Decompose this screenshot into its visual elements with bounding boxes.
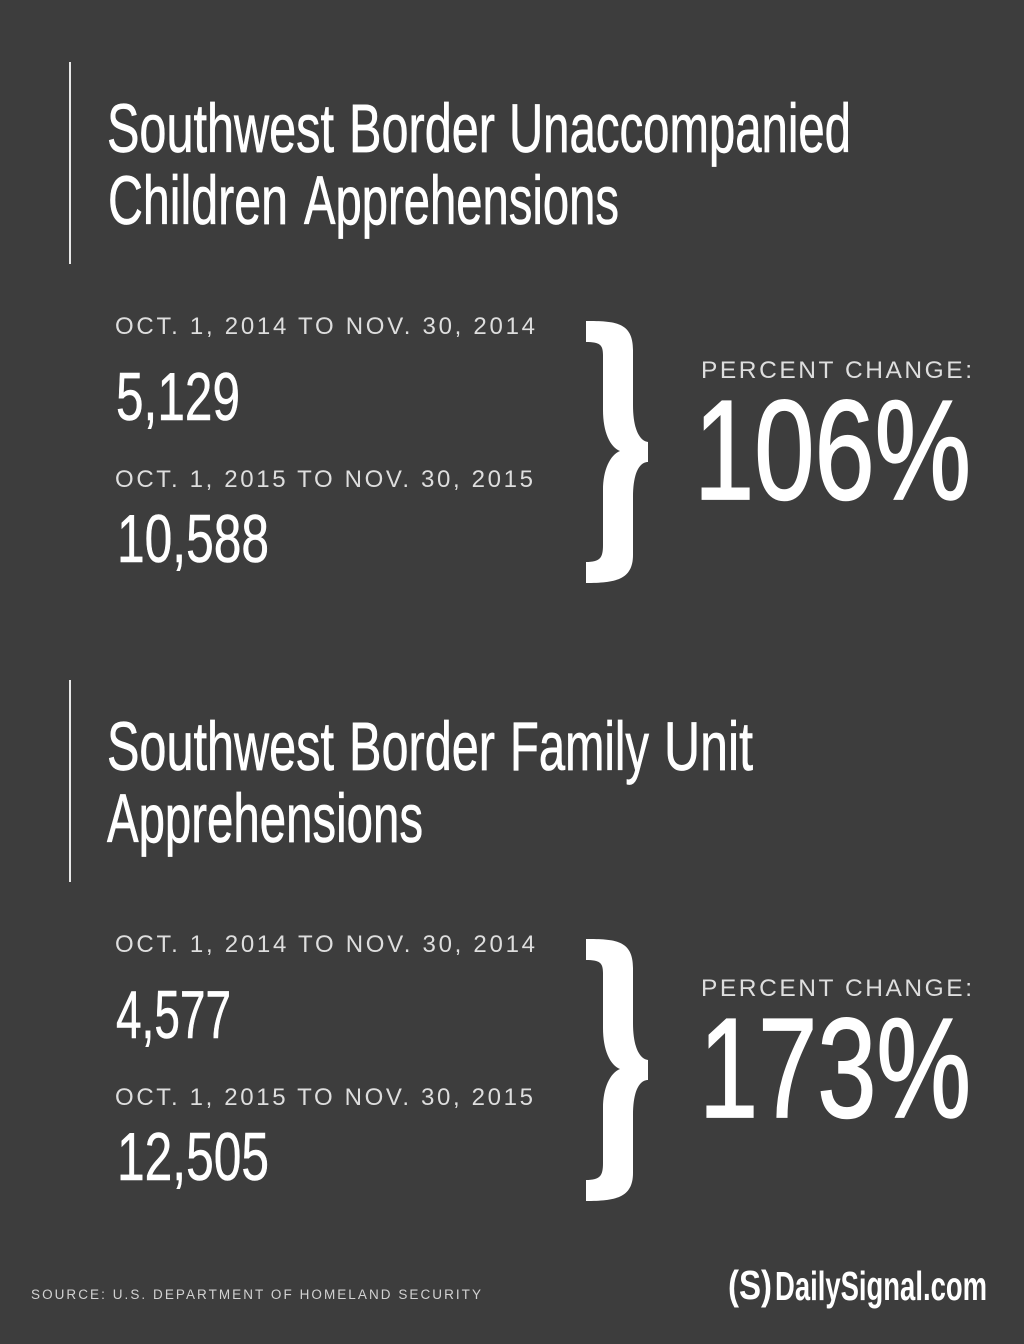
- heading: family units: Family: [510, 708, 649, 785]
- percent change label: PERCENT CHANGE:: [701, 357, 972, 384]
- heading: unaccompanied children: Southwest: [107, 90, 334, 167]
- heading: family units: Southwest: [107, 708, 334, 785]
- panel: family units: [69, 680, 972, 1201]
- date label 2014: OCT. 1, 2014 TO NOV. 30, 2014: [115, 313, 535, 340]
- heading: family units: Border: [349, 708, 495, 785]
- value 2015: 12,505: [117, 1119, 269, 1195]
- icon: right brace: [586, 321, 648, 583]
- icon: right brace: [586, 939, 648, 1201]
- value 2014: 4,577: [116, 977, 231, 1053]
- date label 2015: OCT. 1, 2015 TO NOV. 30, 2015: [115, 466, 533, 493]
- heading rule: [69, 62, 71, 264]
- heading: unaccompanied children: Children: [108, 162, 288, 239]
- value 2014: 5,129: [116, 359, 240, 435]
- value 2015: 10,588: [117, 501, 269, 577]
- percent change label: PERCENT CHANGE:: [701, 975, 972, 1002]
- panel: unaccompanied children: [69, 62, 972, 583]
- heading: family units: Apprehensions: [107, 780, 423, 857]
- heading rule: [69, 680, 71, 882]
- heading: family units: Unit: [664, 708, 753, 785]
- heading: family units: [107, 708, 753, 857]
- date label 2015: OCT. 1, 2015 TO NOV. 30, 2015: [115, 1084, 533, 1111]
- heading: unaccompanied children: Unaccompanied: [509, 90, 851, 167]
- heading: unaccompanied children: [107, 90, 851, 239]
- heading: unaccompanied children: Apprehensions: [304, 162, 619, 239]
- logo: DailySignal.com: (S): [728, 1262, 772, 1308]
- source note: SOURCE: U.S. DEPARTMENT OF HOMELAND SECURITY: [31, 1287, 481, 1302]
- heading: unaccompanied children: Border: [349, 90, 495, 167]
- date label 2014: OCT. 1, 2014 TO NOV. 30, 2014: [115, 931, 535, 958]
